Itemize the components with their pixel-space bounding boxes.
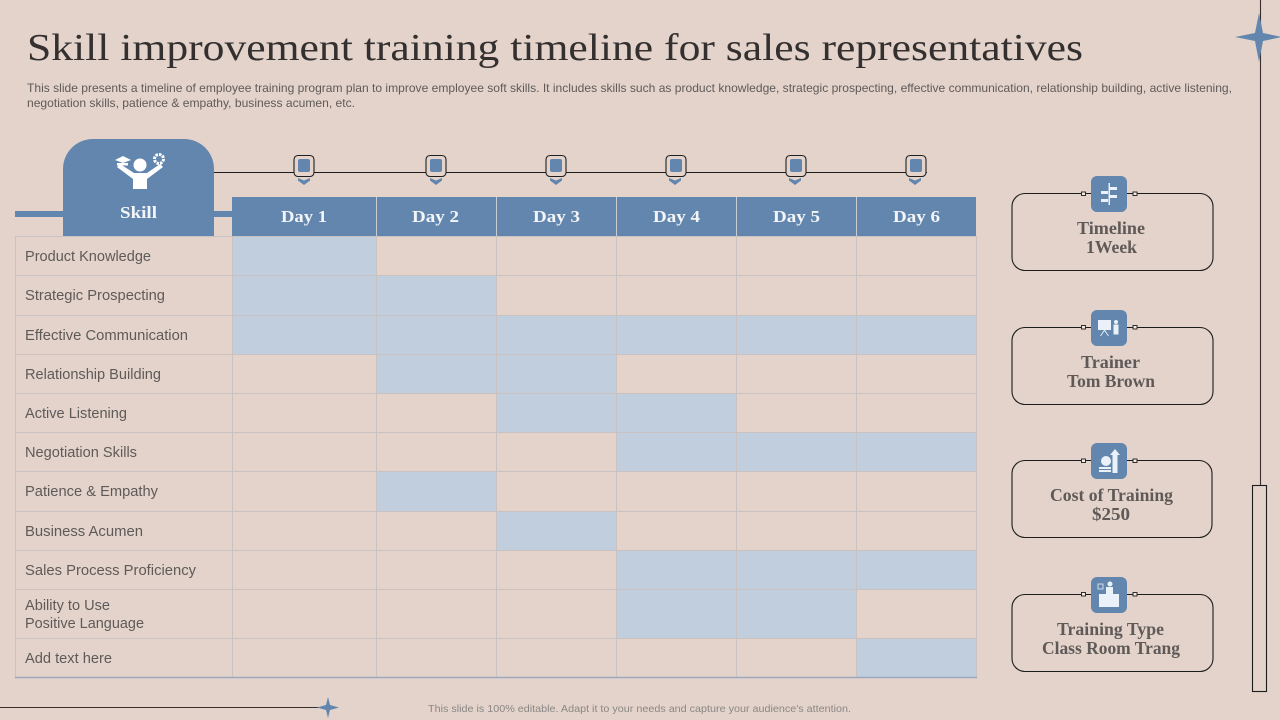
text: trainer value: Tom Brown xyxy=(1067,371,1155,391)
text: cost value: $250 xyxy=(1092,504,1130,524)
pin: day 1 xyxy=(294,156,314,185)
skill header tab xyxy=(15,139,232,236)
table header: days: Day 3 xyxy=(533,207,580,226)
text: training type value xyxy=(1042,619,1180,658)
text: training type value: Training Type xyxy=(1057,619,1164,639)
row labels xyxy=(25,249,197,667)
row labels: Positive Language xyxy=(25,616,144,632)
text: trainer value: Trainer xyxy=(1081,352,1140,372)
text: trainer value xyxy=(1067,352,1155,391)
pin: day 4 xyxy=(666,156,686,185)
table header: days: Day 1 xyxy=(281,207,327,226)
icon: timeline xyxy=(1091,176,1127,212)
row labels: Add text here xyxy=(25,651,112,667)
decoration: right vertical line and star xyxy=(1235,0,1280,692)
row labels: Ability to Use xyxy=(25,598,110,614)
text: timeline value xyxy=(1077,218,1145,257)
icon: person with graduation cap and gear xyxy=(115,154,164,189)
text: training type value: Class Room Trang xyxy=(1042,638,1180,658)
pin: day 6 xyxy=(906,156,926,185)
table header: days: Day 6 xyxy=(893,207,940,226)
footer note: This slide is 100% editable. Adapt it to your needs and capture your audience's attention. xyxy=(428,703,851,715)
row labels: Product Knowledge xyxy=(25,249,151,265)
title: Skill improvement training timeline for sales representatives xyxy=(27,27,1083,69)
row labels: Active Listening xyxy=(25,406,127,422)
timeline connector with day pins xyxy=(214,156,927,185)
table header: days xyxy=(232,197,976,236)
row labels: Patience & Empathy xyxy=(25,484,159,500)
panel: timeline xyxy=(1012,176,1213,270)
schedule shading xyxy=(232,236,976,677)
icon: classroom xyxy=(1091,577,1127,613)
row labels: Effective Communication xyxy=(25,328,188,344)
table header: days: Day 4 xyxy=(653,207,700,226)
description text xyxy=(27,81,1232,110)
row labels: Business Acumen xyxy=(25,524,143,540)
pin: day 3 xyxy=(546,156,566,185)
table header: days: Day 2 xyxy=(412,207,459,226)
panel: trainer xyxy=(1012,310,1213,404)
panel: cost of training xyxy=(1012,443,1212,538)
skill label: Skill xyxy=(120,203,157,222)
text: timeline value: 1Week xyxy=(1086,237,1137,257)
table header: days: Day 5 xyxy=(773,207,820,226)
pin: day 5 xyxy=(786,156,806,185)
row labels: Sales Process Proficiency xyxy=(25,563,197,579)
decoration: bottom line and star xyxy=(0,697,339,718)
text: cost value: Cost of Training xyxy=(1050,485,1173,505)
icon: cost growth xyxy=(1091,443,1127,479)
row labels: Relationship Building xyxy=(25,367,161,383)
text: cost value xyxy=(1050,485,1173,524)
text: timeline value: Timeline xyxy=(1077,218,1145,238)
description text: negotiation skills, patience & empathy, business acumen, etc. xyxy=(27,96,355,110)
row labels: Strategic Prospecting xyxy=(25,288,165,304)
icon: trainer at board xyxy=(1091,310,1127,346)
description text: This slide presents a timeline of employee training program plan to improve employee soft skills. It includes skills such as product knowledge, strategic prospecting, effective communication, relationship building, active listening, xyxy=(27,81,1232,95)
table: skills by day xyxy=(15,197,977,678)
panel: training type xyxy=(1012,577,1213,672)
pin: day 2 xyxy=(426,156,446,185)
row labels: Negotiation Skills xyxy=(25,445,137,461)
